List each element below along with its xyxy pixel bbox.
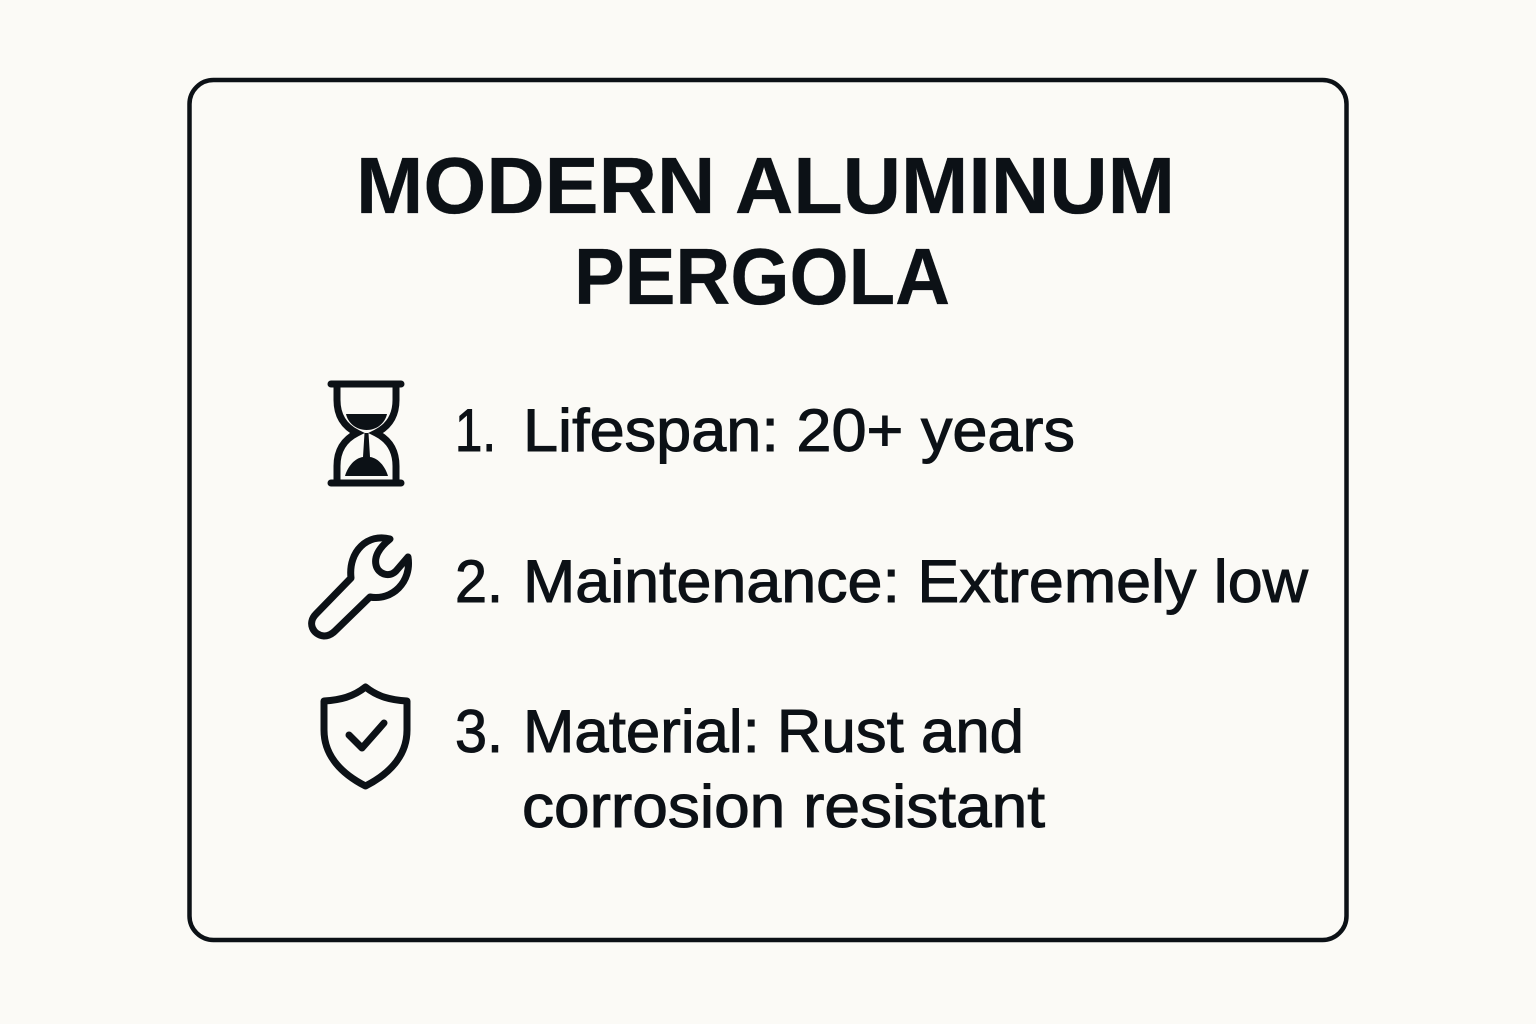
title: PERGOLA	[574, 232, 950, 321]
list item 2: Maintenance: Extremely low	[523, 548, 1309, 615]
title	[356, 141, 1175, 321]
list item 3: corrosion resistant	[522, 773, 1045, 840]
icon: wrench	[312, 538, 409, 636]
icon: hourglass	[331, 384, 401, 483]
list item 1: Lifespan: 20+ years	[523, 397, 1075, 464]
list item 3	[455, 698, 1045, 840]
list item 3: 3.	[455, 698, 503, 765]
list item 2: 2.	[455, 548, 503, 615]
title: MODERN ALUMINUM	[356, 141, 1175, 230]
panel: card	[190, 80, 1346, 940]
list item 1: 1.	[455, 397, 496, 464]
icon: shield with check	[324, 687, 407, 786]
list item 3: Material: Rust and	[523, 698, 1024, 765]
